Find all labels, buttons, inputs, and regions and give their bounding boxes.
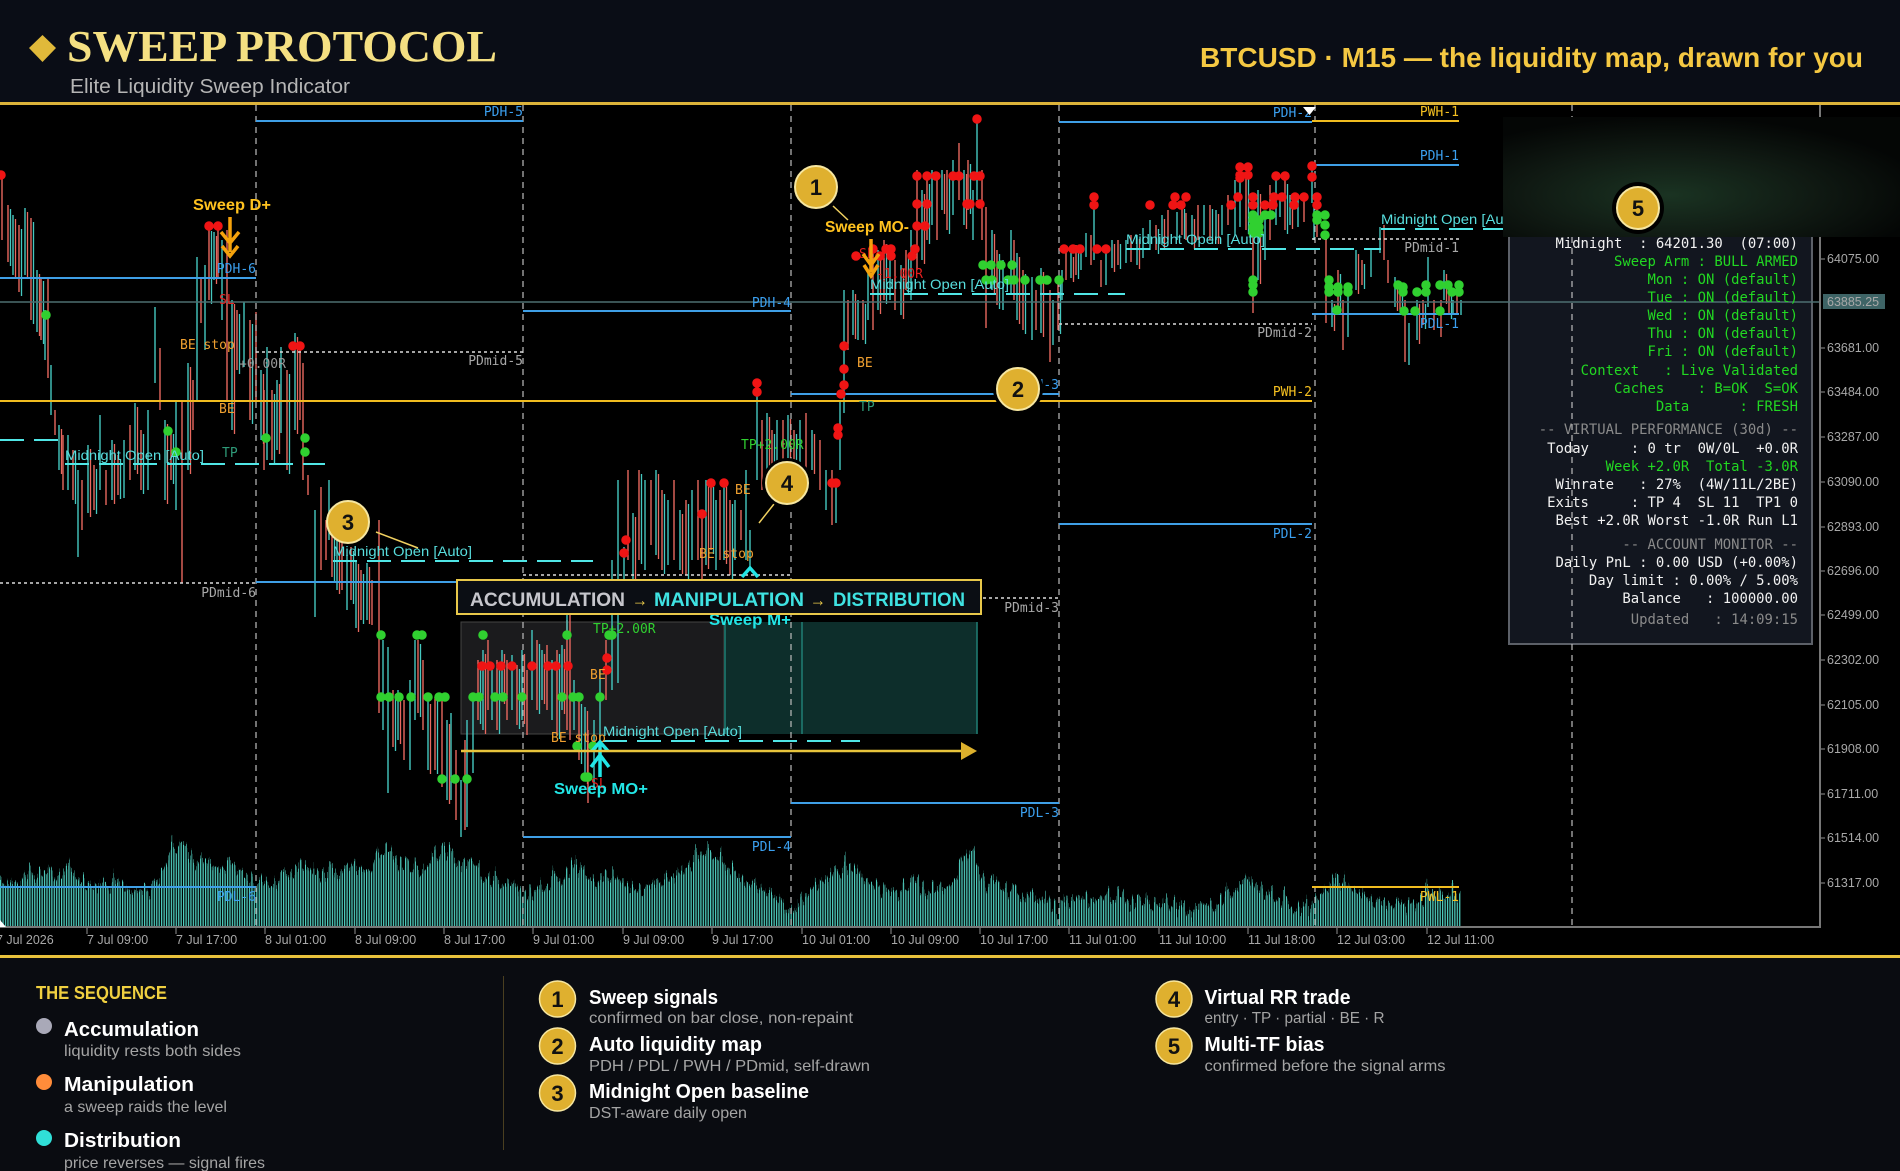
midnight open labels: Midnight Open [Auto] <box>333 543 472 559</box>
badge 1 <box>795 166 837 208</box>
info panel text: Midnight : 64201.30 (07:00) <box>1555 236 1798 252</box>
level labels: PDH-5 <box>484 105 523 120</box>
info panel text: Mon : ON (default) <box>1647 272 1798 288</box>
price axis labels: 63090.00 <box>1827 475 1879 489</box>
panel: manipulation and distribution zone <box>724 622 977 734</box>
liquidity levels: gold weekly <box>0 121 1459 887</box>
level labels: PDH-3 <box>1020 378 1059 393</box>
time axis labels: 10 Jul 01:00 <box>802 933 870 947</box>
title: SWEEP PROTOCOL <box>67 22 497 71</box>
item: distribution <box>36 1130 265 1171</box>
price axis labels: 62696.00 <box>1827 564 1879 578</box>
price axis labels: 62105.00 <box>1827 698 1879 712</box>
candlestick wicks: bullish <box>13 119 1461 837</box>
candlestick wicks: bearish <box>2 143 1457 830</box>
info panel text: Caches : B=OK S=OK <box>1614 381 1799 397</box>
info panel text: Winrate : 27% (4W/11L/2BE) <box>1555 477 1798 493</box>
info panel text: Day limit : 0.00% / 5.00% <box>1589 573 1799 589</box>
time axis labels: 9 Jul 09:00 <box>623 933 684 947</box>
level labels: PDH-4 <box>752 296 791 311</box>
chart background <box>0 105 1900 956</box>
phase banner: → <box>632 590 648 610</box>
info panel text: Exits : TP 4 SL 11 TP1 0 <box>1547 495 1798 511</box>
midnight open labels: Midnight Open [Auto] <box>870 276 1009 292</box>
phase arrow <box>461 742 977 760</box>
legend: sweep signals: confirmed on bar close, non-repaint <box>589 1010 854 1027</box>
subtitle: Elite Liquidity Sweep Indicator <box>70 75 350 98</box>
panel: accumulation zone <box>461 622 724 734</box>
trade labels: SL <box>859 247 875 262</box>
time axis labels: 8 Jul 09:00 <box>355 933 416 947</box>
time axis labels: 7 Jul 09:00 <box>87 933 148 947</box>
time axis labels: 8 Jul 01:00 <box>265 933 326 947</box>
midnight open dashed lines <box>0 229 1503 741</box>
legend: auto liquidity map: Auto liquidity map <box>589 1034 762 1056</box>
trade labels: TP+2.00R <box>593 622 656 637</box>
info panel text: -- ACCOUNT MONITOR -- <box>1622 537 1798 553</box>
session separators <box>256 105 1572 927</box>
info panel text: Updated : 14:09:15 <box>1631 612 1798 628</box>
glow panel behind badge 5 <box>1503 117 1900 237</box>
item: accumulation: liquidity rests both sides <box>64 1043 241 1060</box>
legend: auto liquidity map: 2 <box>551 1034 564 1059</box>
time axis labels: 11 Jul 18:00 <box>1248 933 1315 947</box>
info panel text: Today : 0 tr 0W/0L +0.0R <box>1547 441 1799 457</box>
icon: diamond <box>29 35 56 62</box>
legend: auto liquidity map <box>540 1028 870 1075</box>
trade labels: TP <box>859 400 875 415</box>
phase banner: MANIPULATION <box>654 589 804 611</box>
legend: midnight open baseline <box>540 1075 809 1122</box>
trade labels: SL <box>219 293 235 308</box>
trade labels: BE stop <box>551 731 606 746</box>
time axis labels: 12 Jul 11:00 <box>1427 933 1494 947</box>
phase banner: → <box>810 590 826 610</box>
price axis labels: 63681.00 <box>1827 341 1879 355</box>
time axis labels: 10 Jul 09:00 <box>891 933 959 947</box>
trade labels <box>180 247 923 792</box>
badge 3 <box>327 501 369 543</box>
legend: multi-tf bias: Multi-TF bias <box>1204 1034 1324 1056</box>
sweep signal: M+ <box>709 568 791 629</box>
level labels: PDL-1 <box>1420 317 1459 332</box>
headline: BTCUSD · M15 — the liquidity map, drawn for you <box>1200 42 1863 73</box>
candlestick wicks: additional dense bars <box>10 164 1452 804</box>
legend: sweep signals: Sweep signals <box>589 987 718 1009</box>
trade labels: TP <box>222 446 238 461</box>
callout leaders <box>376 206 848 548</box>
info panel text: Balance : 100000.00 <box>1622 591 1798 607</box>
item: manipulation <box>36 1074 227 1116</box>
time axis labels: 9 Jul 01:00 <box>533 933 594 947</box>
info panel text: Week +2.0R Total -3.0R <box>1606 459 1799 475</box>
price axis labels: 62893.00 <box>1827 520 1879 534</box>
info panel text: Tue : ON (default) <box>1647 290 1798 306</box>
price axis labels: 61711.00 <box>1827 787 1878 801</box>
price axis labels: 64075.00 <box>1827 252 1879 266</box>
level labels: PDmid-2 <box>1257 326 1312 341</box>
trade labels: BE <box>590 668 606 683</box>
midnight open labels: Midnight Open [Auto] <box>65 447 204 463</box>
midnight open labels <box>65 211 1520 739</box>
level labels: PDH-1 <box>1420 149 1459 164</box>
phase banner: ACCUMULATION <box>470 589 625 611</box>
signal dots: red <box>1 119 1317 670</box>
price axis labels: 62302.00 <box>1827 653 1879 667</box>
volume histogram <box>0 830 1461 927</box>
price axis labels: 63484.00 <box>1827 385 1879 399</box>
badge 4: 4 <box>781 471 794 496</box>
midnight open labels: Midnight Open [Auto] <box>603 723 742 739</box>
footer <box>0 955 1900 1171</box>
price axis labels: 61514.00 <box>1827 831 1879 845</box>
info panel text: Sweep Arm : BULL ARMED <box>1614 254 1798 270</box>
level labels: PDmid-1 <box>1404 241 1459 256</box>
item: accumulation <box>36 1018 241 1060</box>
sweep signal: MO- <box>825 219 909 276</box>
badge 2: 2 <box>1012 377 1024 402</box>
current price line <box>0 301 1820 303</box>
item: manipulation: a sweep raids the level <box>64 1099 227 1116</box>
price axis labels: 63287.00 <box>1827 430 1879 444</box>
price axis labels: 61317.00 <box>1827 876 1879 890</box>
level labels: PDmid-6 <box>201 586 256 601</box>
small marker <box>1303 107 1316 115</box>
liquidity levels: dotted mids <box>0 239 1459 598</box>
sweep signal: D+: Sweep D+ <box>193 197 271 214</box>
sweep signal: MO+ <box>554 742 648 798</box>
level labels: PWH-1 <box>1420 105 1459 120</box>
legend: auto liquidity map: PDH / PDL / PWH / PDmid, self-drawn <box>589 1058 870 1075</box>
time axis labels <box>0 933 1494 947</box>
trade labels: BE <box>219 402 235 417</box>
level labels: PDL-6 <box>217 890 256 905</box>
info panel text: Context : Live Validated <box>1581 363 1798 379</box>
badge 1: 1 <box>810 175 822 200</box>
info panel text <box>1539 236 1799 628</box>
legend: multi-tf bias: confirmed before the signal arms <box>1204 1058 1446 1075</box>
time axis labels: 12 Jul 03:00 <box>1337 933 1405 947</box>
price axis labels: 61908.00 <box>1827 742 1879 756</box>
panel: the sequence <box>36 983 265 1171</box>
item: distribution: Distribution <box>64 1130 181 1152</box>
level labels: PWL-1 <box>1420 890 1459 905</box>
level labels: PDH-6 <box>217 262 256 277</box>
time axis labels: 11 Jul 10:00 <box>1159 933 1226 947</box>
phase banner <box>457 580 981 614</box>
info panel text: Daily PnL : 0.00 USD (+0.00%) <box>1555 555 1798 571</box>
badge 4 <box>762 458 812 508</box>
legend: sweep signals: 1 <box>551 987 564 1012</box>
info panel text: -- VIRTUAL PERFORMANCE (30d) -- <box>1539 422 1798 438</box>
badge 3: 3 <box>342 510 354 535</box>
level labels: PDH-2 <box>1273 106 1312 121</box>
level labels: PDmid-3 <box>1004 601 1059 616</box>
sweep signal: D+ <box>193 197 271 256</box>
legend: multi-tf bias <box>1156 1028 1446 1075</box>
trade labels: +0.00R <box>239 357 286 372</box>
info panel text: Best +2.0R Worst -1.0R Run L1 <box>1555 513 1798 529</box>
price axis labels <box>1823 252 1885 890</box>
level labels: PDL-2 <box>1273 527 1312 542</box>
trade labels: BE stop <box>699 547 754 562</box>
header <box>0 0 1900 105</box>
item: manipulation: Manipulation <box>64 1074 194 1096</box>
legend: midnight open baseline: 3 <box>551 1081 564 1106</box>
heading: THE SEQUENCE <box>36 983 167 1003</box>
trade labels: TP+2.00R <box>741 438 804 453</box>
phase banner: DISTRIBUTION <box>833 589 965 611</box>
trade labels: -1.00R <box>876 267 923 282</box>
legend: sweep signals <box>540 981 854 1027</box>
trade labels: BE <box>735 483 751 498</box>
trade labels: BE stop <box>180 338 235 353</box>
sweep signal: MO+: Sweep MO+ <box>554 781 648 798</box>
price axis labels: 62499.00 <box>1827 608 1879 622</box>
level labels: PDL-4 <box>752 840 791 855</box>
info panel text: Wed : ON (default) <box>1647 308 1798 324</box>
time axis labels: 7 Jul 17:00 <box>176 933 237 947</box>
info panel text: Data : FRESH <box>1656 399 1798 415</box>
legend: midnight open baseline: DST-aware daily open <box>589 1105 747 1122</box>
info panel text: Fri : ON (default) <box>1647 344 1798 360</box>
time axis labels: 8 Jul 17:00 <box>444 933 505 947</box>
midnight open labels: Midnight Open [Auto] <box>1126 231 1265 247</box>
axes <box>0 105 1825 934</box>
time axis labels: 9 Jul 17:00 <box>712 933 773 947</box>
badge 2 <box>993 364 1043 414</box>
badge 5: 5 <box>1632 196 1644 221</box>
legend: midnight open baseline: Midnight Open baseline <box>589 1081 809 1103</box>
trade labels: SL <box>591 777 607 792</box>
legend: multi-tf bias: 5 <box>1168 1034 1180 1059</box>
info panel text: Thu : ON (default) <box>1647 326 1798 342</box>
signal dots: green <box>46 215 1459 779</box>
legend: virtual rr trade <box>1156 981 1384 1027</box>
midnight open labels: Midnight Open [Auto] <box>1381 211 1520 227</box>
level labels: PDmid-5 <box>468 354 523 369</box>
liquidity levels: blue highs and lows <box>0 121 1459 887</box>
level labels: PDL-3 <box>1020 806 1059 821</box>
sweep signal: M+: Sweep M+ <box>709 612 791 629</box>
time axis labels: 11 Jul 01:00 <box>1069 933 1136 947</box>
time axis labels: 10 Jul 17:00 <box>980 933 1048 947</box>
badge 5 <box>1612 182 1664 234</box>
level labels <box>201 105 1459 905</box>
trade labels: BE <box>857 356 873 371</box>
legend: virtual rr trade: 4 <box>1168 987 1181 1012</box>
level labels: PWH-2 <box>1273 385 1312 400</box>
info panel <box>1509 225 1812 644</box>
price axis labels: 63885.25 <box>1827 295 1879 309</box>
item: accumulation: Accumulation <box>64 1019 199 1041</box>
sweep signal: MO-: Sweep MO- <box>825 219 909 236</box>
legend: virtual rr trade: Virtual RR trade <box>1204 987 1350 1009</box>
legend: virtual rr trade: entry · TP · partial · BE · R <box>1204 1010 1384 1027</box>
